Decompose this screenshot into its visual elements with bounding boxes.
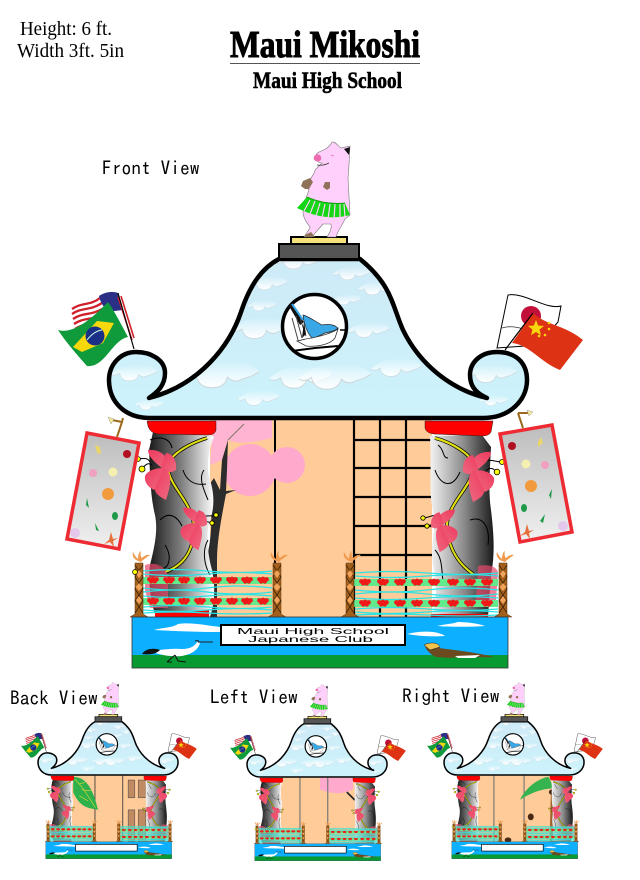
flags (58, 292, 583, 370)
pig on top (297, 142, 350, 237)
fence (45, 820, 174, 842)
sign text: Maui High School (237, 626, 389, 636)
dimensions text (17, 18, 124, 62)
fence (451, 820, 580, 842)
left wall (281, 778, 355, 844)
label: right view: Right View (402, 687, 500, 706)
label: left view: Left View (210, 688, 298, 707)
sign text (237, 626, 389, 644)
left view mikoshi (230, 685, 406, 861)
back wall (72, 776, 146, 842)
right wall (478, 776, 555, 843)
wall with doors and lattice (210, 420, 432, 617)
right view mikoshi (427, 683, 603, 859)
title: Maui Mikoshi (230, 24, 420, 66)
roof with clouds and bird crest (109, 237, 527, 418)
label: back view: Back View (10, 689, 98, 708)
dimensions text: Height: 6 ft. (20, 18, 112, 40)
left hanging panel (67, 417, 139, 549)
right hanging panel (500, 410, 572, 542)
cherry tree (205, 420, 305, 617)
front view mikoshi (58, 142, 583, 668)
base with birds and sign (132, 617, 508, 668)
pillars with vines (136, 421, 504, 617)
back view mikoshi (21, 683, 197, 859)
fence with hibiscus and posts (130, 551, 514, 617)
dimensions text: Width 3ft. 5in (17, 40, 124, 62)
subtitle: Maui High School (253, 68, 402, 93)
label: front view: Front View (102, 159, 200, 178)
fence (254, 822, 383, 844)
sign text: Japanese Club (248, 634, 374, 644)
